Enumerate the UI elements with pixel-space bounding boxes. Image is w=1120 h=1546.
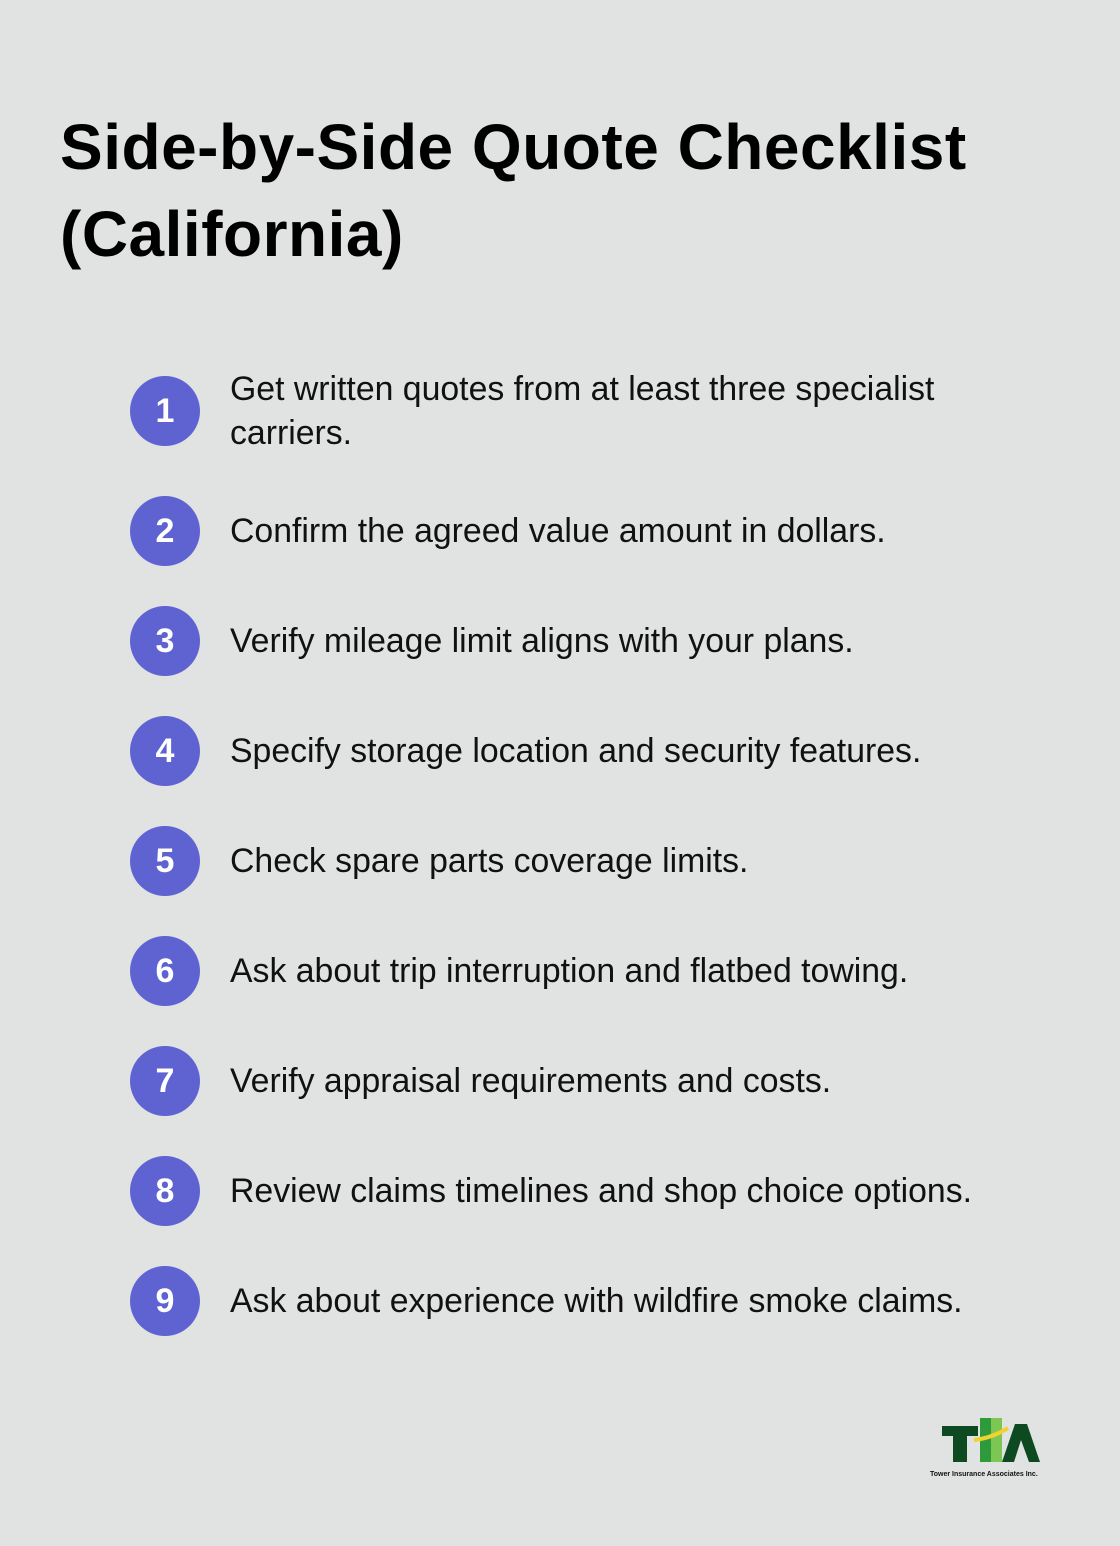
item 9: 9 (156, 1282, 174, 1320)
item 3 (130, 606, 854, 676)
item 3: 3 (156, 622, 174, 660)
title: (California) (60, 198, 404, 270)
item 6: Ask about trip interruption and flatbed towing. (230, 952, 908, 990)
item 9: Ask about experience with wildfire smoke claims. (230, 1282, 963, 1320)
item 5: Check spare parts coverage limits. (230, 842, 748, 880)
item 1 (130, 370, 934, 452)
item 4: Specify storage location and security features. (230, 732, 921, 770)
title (60, 111, 967, 270)
item 7 (130, 1046, 831, 1116)
item 4 (130, 716, 921, 786)
item 2 (130, 496, 886, 566)
logo (930, 1418, 1040, 1478)
item 4: 4 (156, 732, 174, 770)
logo: Tower Insurance Associates Inc. (930, 1471, 1038, 1478)
item 5: 5 (156, 842, 174, 880)
item 1: 1 (156, 392, 174, 430)
item 6: 6 (156, 952, 174, 990)
item 8: 8 (156, 1172, 174, 1210)
item 8 (130, 1156, 972, 1226)
item 2: 2 (156, 512, 174, 550)
item 7: 7 (156, 1062, 174, 1100)
item 7: Verify appraisal requirements and costs. (230, 1062, 831, 1100)
item 3: Verify mileage limit aligns with your plans. (230, 622, 854, 660)
item 1: carriers. (230, 414, 352, 452)
item 1: Get written quotes from at least three specialist (230, 370, 934, 408)
item 2: Confirm the agreed value amount in dollars. (230, 512, 886, 550)
title: Side-by-Side Quote Checklist (60, 111, 967, 183)
item 5 (130, 826, 748, 896)
item 6 (130, 936, 908, 1006)
item 9 (130, 1266, 963, 1336)
item 8: Review claims timelines and shop choice options. (230, 1172, 972, 1210)
